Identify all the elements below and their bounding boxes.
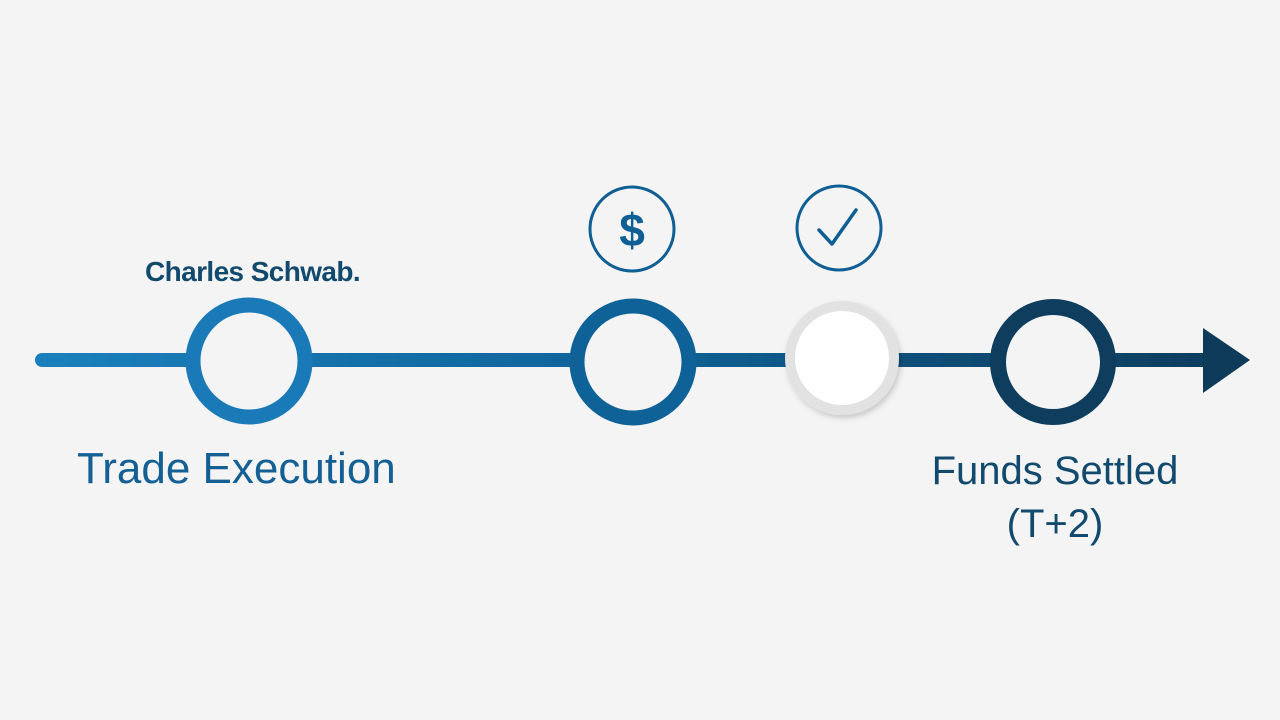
node 1: trade execution — [193, 305, 305, 417]
timeline line — [35, 353, 1210, 367]
node 2 — [577, 306, 689, 418]
label: trade execution: Trade Execution — [77, 444, 396, 493]
label: funds settled: (T+2) — [1007, 502, 1103, 546]
icon: dollar — [590, 187, 674, 271]
icon: check — [797, 186, 881, 270]
node 4: funds settled — [998, 307, 1108, 417]
arrow head — [1203, 328, 1250, 393]
label: funds settled: Funds Settled — [932, 449, 1178, 493]
node 3: white — [790, 306, 894, 410]
logo text: Charles Schwab: Charles Schwab. — [145, 256, 360, 287]
icon: dollar: $ — [619, 204, 645, 256]
